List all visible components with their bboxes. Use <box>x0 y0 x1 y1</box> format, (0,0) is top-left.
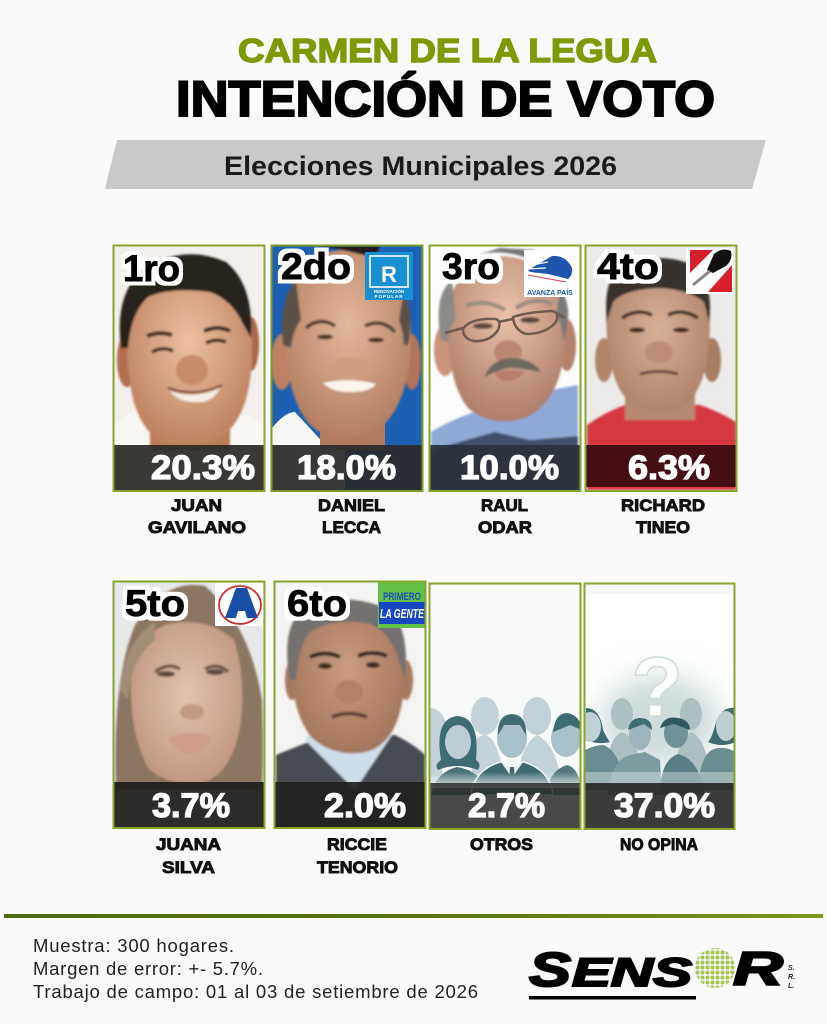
logo: Acción Popular <box>215 583 263 626</box>
banner: elecciones municipales: Elecciones Municipales 2026 <box>224 151 617 181</box>
name: Juan Gavilano: JUAN <box>171 496 222 515</box>
result strip: 18.0% <box>272 445 422 490</box>
portrait: Juana Silva <box>114 582 264 790</box>
name: Juan Gavilano <box>148 496 246 537</box>
name: Raul Odar <box>478 496 532 537</box>
logo: Renovación Popular: POPULAR <box>374 294 404 299</box>
panel: candidate 1 Juan Gavilano <box>113 245 265 537</box>
result strip: 6.3% <box>586 445 736 487</box>
name: Daniel Lecca <box>318 496 385 537</box>
name: Juan Gavilano: GAVILANO <box>148 518 246 537</box>
title: Carmen de la Legua: CARMEN DE LA LEGUA <box>238 32 657 69</box>
footer: methodology notes: Muestra: 300 hogares. <box>33 935 234 956</box>
logo: shovel party <box>686 248 733 294</box>
logo: Primero La Gente <box>378 582 426 628</box>
result strip: 2.7% <box>430 783 580 828</box>
logo: Sensor S.R.L. <box>528 948 794 1000</box>
logo: Sensor S.R.L.: R. <box>788 974 795 981</box>
card frame <box>274 582 426 828</box>
name: Richard Tineo: TINEO <box>636 518 690 537</box>
portrait: Riccie Tenorio <box>274 581 426 830</box>
icon: question mark: ? <box>631 640 683 734</box>
card frame <box>114 582 264 828</box>
percentage: 3.7%: 3.7% <box>152 787 230 825</box>
portrait: Richard Tineo <box>585 245 737 491</box>
card frame <box>114 246 264 491</box>
name: Riccie Tenorio: RICCIE <box>327 835 387 854</box>
card frame <box>272 246 422 491</box>
logo: Sensor S.R.L.: S. <box>788 965 795 972</box>
name: No opina: NO OPINA <box>620 835 698 854</box>
logo: Renovación Popular: RENOVACIÓN <box>374 287 404 294</box>
percentage: 20.3%: 20.3% <box>151 449 255 487</box>
logo: Sensor S.R.L.: ENS <box>572 951 692 995</box>
rank: 1ro: 1ro <box>123 248 180 289</box>
panel: candidate 2 Daniel Lecca <box>271 245 423 537</box>
name: Riccie Tenorio: TENORIO <box>317 858 398 877</box>
card frame <box>430 584 580 829</box>
heading: Intención de voto: INTENCIÓN DE VOTO <box>176 71 715 127</box>
percentage: 37.0%: 37.0% <box>614 787 715 825</box>
name: Raul Odar: RAUL <box>481 496 528 515</box>
logo: Primero La Gente: LA GENTE <box>380 606 424 621</box>
name: Otros: OTROS <box>470 835 533 854</box>
result strip: 3.7% <box>114 782 264 827</box>
logo: Avanza País: AVANZA PAÍS <box>527 288 573 297</box>
name: Juana Silva: JUANA <box>156 835 221 854</box>
rank: 6to: 6to <box>287 583 347 624</box>
logo: Primero La Gente: PRIMERO <box>383 591 421 603</box>
percentage: 6.3%: 6.3% <box>628 449 710 487</box>
rank: 4to: 4to <box>597 246 659 287</box>
footer: methodology notes <box>33 935 478 1002</box>
panel: candidate 5 Juana Silva <box>113 581 265 877</box>
percentage: 18.0%: 18.0% <box>297 449 396 487</box>
rank: 5to: 5to <box>125 583 185 624</box>
portrait: Raul Odar <box>429 245 581 491</box>
logo: Renovación Popular: R <box>381 262 397 287</box>
rank: 3ro: 3ro <box>442 246 500 287</box>
panel: otros <box>428 582 582 850</box>
name: Juana Silva <box>156 835 221 877</box>
logo: Sensor S.R.L.: L. <box>788 983 794 990</box>
footer: methodology notes: Trabajo de campo: 01 al 03 de setiembre de 2026 <box>33 981 478 1002</box>
percentage: 2.7%: 2.7% <box>468 787 545 825</box>
illustration: crowd silhouettes <box>430 697 580 795</box>
panel: candidate 6 Riccie Tenorio <box>274 581 426 877</box>
name: Riccie Tenorio <box>317 835 398 877</box>
card frame <box>586 246 736 491</box>
name: Raul Odar: ODAR <box>478 518 532 537</box>
header <box>105 32 766 189</box>
percentage: 10.0%: 10.0% <box>460 449 559 487</box>
logo: Sensor S.R.L.: R <box>733 942 783 995</box>
result strip: 37.0% <box>585 783 734 828</box>
result strip: 2.0% <box>275 782 425 827</box>
percentage: 2.0%: 2.0% <box>324 787 406 825</box>
portrait: Juan Gavilano <box>114 246 264 450</box>
name: Richard Tineo <box>621 496 705 537</box>
name: Daniel Lecca: LECCA <box>322 518 381 537</box>
logo: Renovación Popular <box>365 252 413 300</box>
banner: elecciones municipales <box>105 140 766 189</box>
name: Juana Silva: SILVA <box>162 858 215 877</box>
illustration: crowd with question mark <box>586 656 734 795</box>
name: Daniel Lecca: DANIEL <box>318 496 385 515</box>
name: Richard Tineo: RICHARD <box>621 496 705 515</box>
card frame <box>584 584 734 829</box>
panel: no opina <box>579 583 736 854</box>
logo: Sensor S.R.L.: S <box>529 944 571 997</box>
result strip: 10.0% <box>430 445 580 490</box>
logo: Avanza País <box>524 250 576 297</box>
card frame <box>430 246 580 491</box>
portrait: Daniel Lecca <box>271 245 423 491</box>
panel: candidate 4 Richard Tineo <box>585 245 737 537</box>
rank: 2do: 2do <box>281 246 351 287</box>
panel: candidate 3 Raul Odar <box>429 245 581 537</box>
footer: methodology notes: Margen de error: +- 5.7%. <box>33 958 263 979</box>
result strip: 20.3% <box>114 445 264 490</box>
